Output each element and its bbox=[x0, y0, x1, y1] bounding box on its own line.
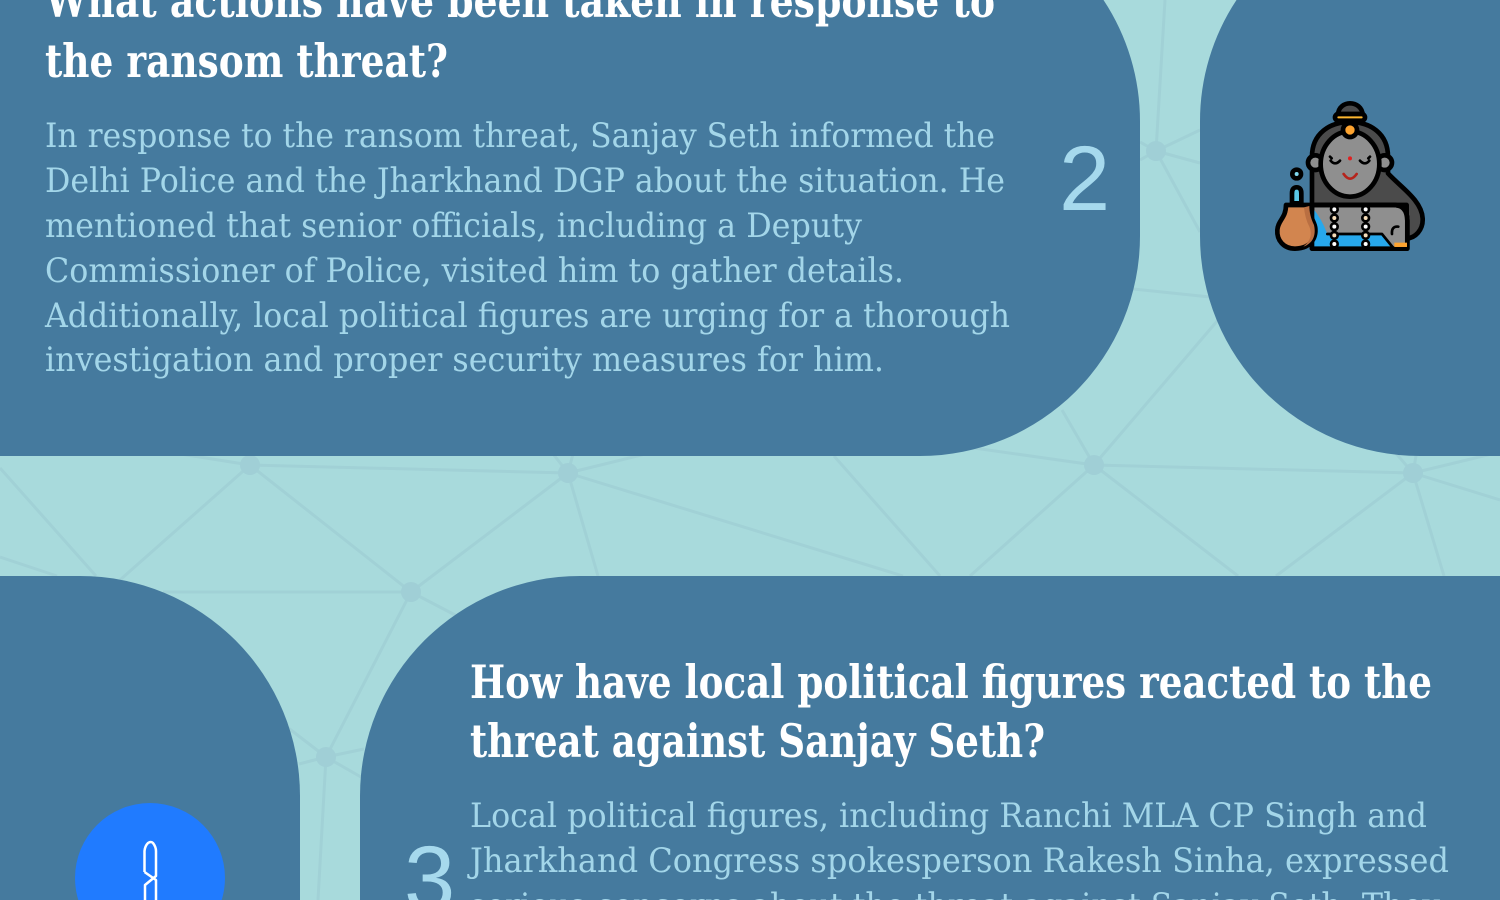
body text: response answer: mentioned that senior officials, including a Deputy bbox=[45, 206, 863, 246]
heading: reaction question: threat against Sanjay Seth? bbox=[470, 714, 1045, 768]
body text: reaction answer: Jharkhand Congress spokesperson Rakesh Sinha, expressed bbox=[467, 841, 1449, 881]
body text: response answer bbox=[44, 116, 1010, 380]
panel: icon card bottom left bbox=[0, 576, 300, 900]
number 2: 2 bbox=[1059, 128, 1110, 230]
body text: response answer: Delhi Police and the Jharkhand DGP about the situation. He bbox=[45, 161, 1005, 201]
icon: blue circle with white outline bbox=[75, 803, 225, 900]
body text: response answer: Additionally, local political figures are urging for a thorough bbox=[44, 296, 1010, 336]
heading: response question: the ransom threat? bbox=[45, 34, 448, 88]
body text: reaction answer bbox=[467, 796, 1449, 900]
body text: response answer: Commissioner of Police, visited him to gather details. bbox=[45, 251, 904, 291]
icon: goddess with flask bbox=[1277, 103, 1423, 249]
body text: reaction answer: Local political figures, including Ranchi MLA CP Singh and bbox=[470, 796, 1427, 836]
panel: ransom threat response bbox=[0, 0, 1140, 456]
body text: response answer: In response to the ransom threat, Sanjay Seth informed the bbox=[45, 116, 995, 156]
panel: icon card top right bbox=[1200, 0, 1500, 456]
body text: response answer: investigation and proper security measures for him. bbox=[45, 340, 884, 380]
panel: political reaction bbox=[360, 576, 1500, 900]
